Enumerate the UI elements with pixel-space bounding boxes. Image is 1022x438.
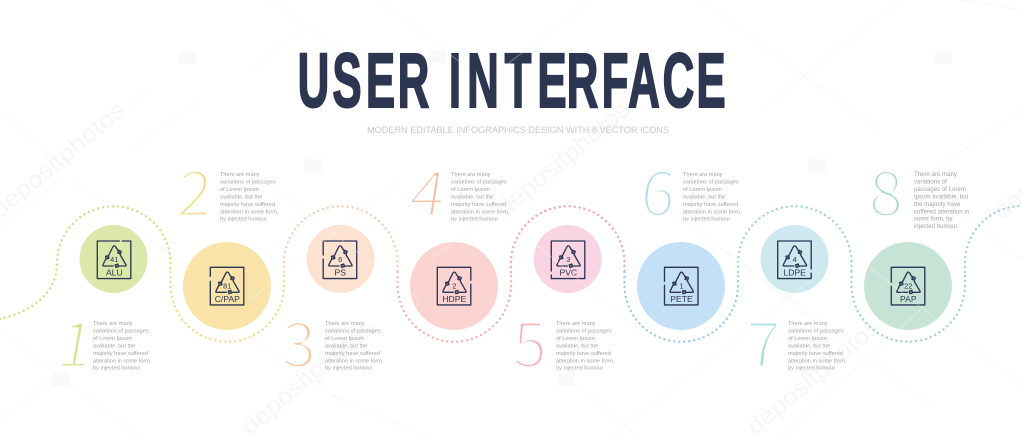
text block 3: variations of passages [325, 328, 381, 334]
icon: PVC recycling code: PVC [559, 268, 577, 278]
text block 7: of Lorem Ipsum [788, 336, 827, 342]
icon: HDPE recycling code [437, 267, 471, 305]
text block 3: There are many [325, 321, 365, 327]
text block 3: by injected humour [325, 366, 372, 372]
number 8: 8 [869, 144, 903, 235]
text block 5: majority have suffered [556, 351, 611, 357]
text block 8: some form, by [914, 216, 954, 223]
text block 5: available, but the [556, 343, 598, 349]
icon: LDPE recycling code: LDPE [783, 268, 806, 278]
number 4: 4 [404, 143, 453, 235]
icon: PVC recycling code [551, 241, 585, 279]
text block 6: majority have suffered [683, 202, 738, 208]
text block 8: Ipsum available, but [914, 193, 969, 200]
step 8 [864, 144, 969, 330]
number 1: 1 [51, 295, 102, 386]
title: USERINTERFACE [298, 38, 726, 124]
text block 2: of Lorem Ipsum [220, 187, 259, 193]
icon: PS recycling code: PS [334, 268, 346, 278]
text block 8: the majority have [914, 201, 961, 208]
text block 6: by injected humour [683, 217, 730, 223]
icon: C/PAP recycling code: 81 [223, 281, 231, 290]
text block 6: variations of passages [683, 179, 739, 185]
circle 7 [760, 225, 828, 293]
step 6 [637, 144, 742, 330]
text block 3: majority have suffered [325, 351, 380, 357]
text block 4: available, but the [451, 194, 493, 200]
text block 3: of Lorem Ipsum [325, 336, 364, 342]
circle 2 [183, 242, 271, 330]
text block 6: of Lorem Ipsum [683, 187, 722, 193]
text block 2: variations of passages [220, 179, 276, 185]
icon: LDPE recycling code [778, 241, 811, 279]
icon: HDPE recycling code: 2 [452, 281, 456, 290]
text block 2: There are many [220, 172, 260, 178]
text block 8: There are many [914, 171, 958, 178]
text block 4: alteration in some form, [451, 209, 510, 215]
watermark: diagonal lines and stock marks: depositphotos [492, 96, 635, 223]
icon: HDPE recycling code: HDPE [442, 294, 466, 304]
text block 8: injected humour. [914, 223, 959, 230]
text block 5: of Lorem Ipsum [556, 336, 595, 342]
text block 7: There are many [788, 321, 828, 327]
icon: PS recycling code: 6 [338, 255, 342, 264]
icon: PAP recycling code: PAP [900, 294, 917, 304]
text block 3: alteration in some form, [325, 358, 384, 364]
text block 5: There are many [556, 321, 596, 327]
text block 3: available, but the [325, 343, 367, 349]
circle 5 [534, 225, 602, 293]
number 3: 3 [282, 295, 316, 386]
icon: PAP recycling code [891, 267, 925, 305]
step 4 [404, 143, 510, 330]
number 2: 2 [175, 144, 216, 235]
watermark: diagonal lines and stock marks: depositphotos [742, 314, 885, 438]
text block 6: There are many [683, 172, 723, 178]
step 3 [282, 225, 384, 386]
step 5 [513, 225, 615, 386]
icon: PS recycling code [323, 241, 357, 279]
icon: PVC recycling code: 3 [566, 255, 570, 264]
text block 7: alteration in some form, [788, 358, 847, 364]
watermark: diagonal lines and stock marks: depositphotos [237, 314, 380, 438]
text block 4: variations of passages [451, 179, 507, 185]
circle 3 [306, 225, 374, 293]
text block 7: variations of passages [788, 328, 844, 334]
text block 1: available, but the [93, 343, 135, 349]
icon: PAP recycling code: 22 [904, 281, 912, 290]
number 7: 7 [746, 295, 781, 386]
text block 8: suffered alteration in [914, 208, 969, 215]
circle 4 [410, 242, 498, 330]
text block 2: by injected humour [220, 217, 267, 223]
text block 7: majority have suffered [788, 351, 843, 357]
icon: ALU recycling code: ALU [106, 268, 123, 278]
text block 4: majority have suffered [451, 202, 506, 208]
text block 1: alteration in some form, [93, 358, 152, 364]
text block 7: available, but the [788, 343, 830, 349]
circle 8 [864, 242, 952, 330]
icon: C/PAP recycling code: C/PAP [215, 294, 240, 304]
circle 6 [637, 242, 725, 330]
text block 2: majority have suffered [220, 202, 275, 208]
text block 1: majority have suffered [93, 351, 148, 357]
text block 1: of Lorem Ipsum [93, 336, 132, 342]
circle 1 [80, 225, 148, 293]
subtitle: MODERN EDITABLE INFOGRAPHICS DESIGN WITH 8 VECTOR ICONS [367, 125, 669, 135]
number 5: 5 [513, 295, 547, 386]
icon: PETE recycling code: 1 [679, 281, 684, 290]
text block 4: of Lorem Ipsum [451, 187, 490, 193]
text block 5: by injected humour [556, 366, 603, 372]
icon: ALU recycling code [97, 241, 131, 279]
text block 8: passages of Lorem [914, 186, 966, 193]
text block 1: There are many [93, 321, 133, 327]
text block 5: variations of passages [556, 328, 612, 334]
text block 2: alteration in some form, [220, 209, 279, 215]
step 2 [175, 144, 279, 330]
step 7 [746, 225, 847, 386]
text block 4: by injected humour [451, 217, 498, 223]
text block 8: variations of [914, 178, 947, 185]
text block 5: alteration in some form, [556, 358, 615, 364]
number 6: 6 [638, 144, 679, 235]
icon: PETE recycling code [664, 267, 698, 305]
text block 1: variations of passages [93, 328, 149, 334]
step 1 [51, 225, 152, 386]
icon: PETE recycling code: PETE [670, 294, 693, 304]
text block 7: by injected humour [788, 366, 835, 372]
text block 6: alteration in some form, [683, 209, 742, 215]
text block 4: There are many [451, 172, 491, 178]
icon: LDPE recycling code: 4 [793, 255, 797, 264]
text block 1: by injected humour [93, 366, 140, 372]
icon: C/PAP recycling code [210, 267, 244, 305]
timeline: dotted wave [0, 206, 1022, 342]
text block 6: available, but the [683, 194, 725, 200]
icon: ALU recycling code: 41 [110, 255, 118, 264]
text block 2: available, but the [220, 194, 262, 200]
